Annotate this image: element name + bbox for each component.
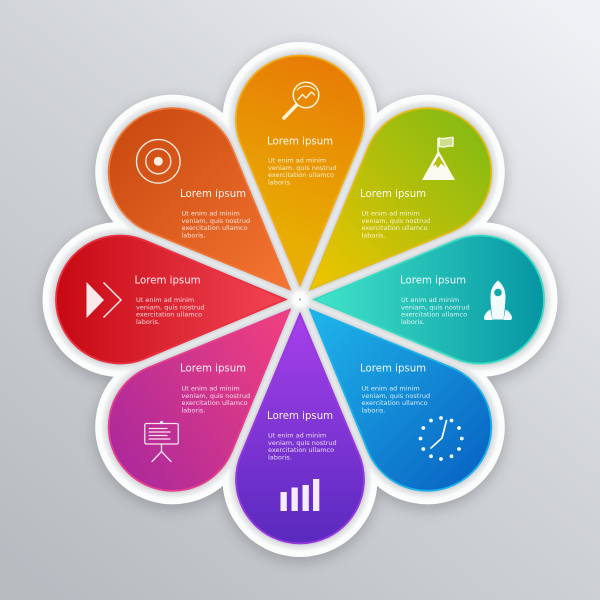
body text: laboris. bbox=[182, 231, 205, 239]
body text: Ut enim ad minim bbox=[401, 296, 459, 304]
panel: bottom-left magenta petal bbox=[82, 264, 335, 517]
petal shape bbox=[82, 264, 335, 517]
body text: laboris. bbox=[362, 406, 385, 414]
panel: left red petal bbox=[56, 236, 286, 364]
body text: veniam, quis nostrud bbox=[362, 217, 430, 225]
panel: bottom purple petal bbox=[236, 314, 364, 543]
heading: Lorem ipsum bbox=[360, 364, 426, 375]
panel: top-left orange-red petal bbox=[82, 82, 335, 335]
body text: veniam, quis nostrud bbox=[182, 392, 250, 400]
heading: Lorem ipsum bbox=[360, 189, 426, 200]
petal shape bbox=[265, 82, 518, 335]
panel: top orange petal bbox=[236, 56, 364, 285]
body text: laboris. bbox=[268, 453, 292, 461]
heading: Lorem ipsum bbox=[180, 364, 246, 375]
panel: right teal petal bbox=[314, 236, 544, 364]
body text: veniam, quis nostrud bbox=[182, 217, 250, 225]
heading: Lorem ipsum bbox=[180, 189, 246, 200]
body text: Ut enim ad minim bbox=[182, 210, 240, 218]
body text: exercitation ullamco bbox=[268, 446, 334, 454]
icon: flag on mountain bbox=[422, 137, 455, 180]
body text: laboris. bbox=[268, 178, 292, 186]
petal shape bbox=[236, 56, 364, 285]
body text: laboris. bbox=[136, 318, 160, 326]
body text: Ut enim ad minim bbox=[268, 156, 326, 164]
petal shape bbox=[314, 236, 544, 364]
white flower backing bbox=[56, 56, 544, 543]
heading: Lorem ipsum bbox=[134, 276, 201, 286]
body text: exercitation ullamco bbox=[401, 310, 467, 318]
petal shape bbox=[265, 264, 518, 517]
body text: laboris. bbox=[401, 318, 425, 326]
body text: Ut enim ad minim bbox=[362, 210, 420, 218]
body text: laboris. bbox=[182, 406, 205, 414]
panel: bottom-right blue petal bbox=[265, 264, 518, 517]
body text: exercitation ullamco bbox=[136, 310, 202, 318]
body text: veniam, quis nostrud bbox=[401, 303, 470, 311]
body text: veniam, quis nostrud bbox=[136, 303, 205, 311]
soft grey bevel around petals bbox=[56, 56, 544, 543]
petal shape bbox=[82, 82, 335, 335]
body text: exercitation ullamco bbox=[362, 399, 428, 407]
icon: presentation board bbox=[145, 422, 178, 462]
body text: Ut enim ad minim bbox=[136, 296, 194, 304]
icon: target bbox=[136, 140, 180, 183]
body text: exercitation ullamco bbox=[182, 224, 248, 232]
icon: clock bbox=[419, 416, 464, 461]
body text: veniam, quis nostrud bbox=[362, 392, 430, 400]
heading: Lorem ipsum bbox=[400, 276, 466, 286]
body text: Ut enim ad minim bbox=[182, 384, 240, 392]
heading: Lorem ipsum bbox=[267, 411, 333, 422]
body text: exercitation ullamco bbox=[362, 224, 428, 232]
petal shape bbox=[56, 236, 286, 364]
petal shape bbox=[236, 314, 364, 543]
heading: Lorem ipsum bbox=[267, 136, 333, 148]
body text: Ut enim ad minim bbox=[268, 432, 326, 440]
darker bevel edge around petals bbox=[56, 56, 544, 543]
panel: top-right green petal bbox=[265, 82, 518, 335]
body text: veniam, quis nostrud bbox=[268, 439, 337, 447]
body text: laboris. bbox=[362, 231, 385, 239]
icon: forward arrows bbox=[86, 282, 121, 318]
body text: Ut enim ad minim bbox=[362, 384, 420, 392]
icon: bar chart bbox=[280, 479, 319, 511]
icon: rocket bbox=[484, 280, 512, 320]
flower drop shadow bbox=[56, 60, 544, 548]
body text: veniam, quis nostrud bbox=[268, 164, 337, 172]
body text: exercitation ullamco bbox=[268, 171, 334, 179]
body text: exercitation ullamco bbox=[182, 399, 248, 407]
icon: magnifier with chart bbox=[284, 82, 319, 118]
